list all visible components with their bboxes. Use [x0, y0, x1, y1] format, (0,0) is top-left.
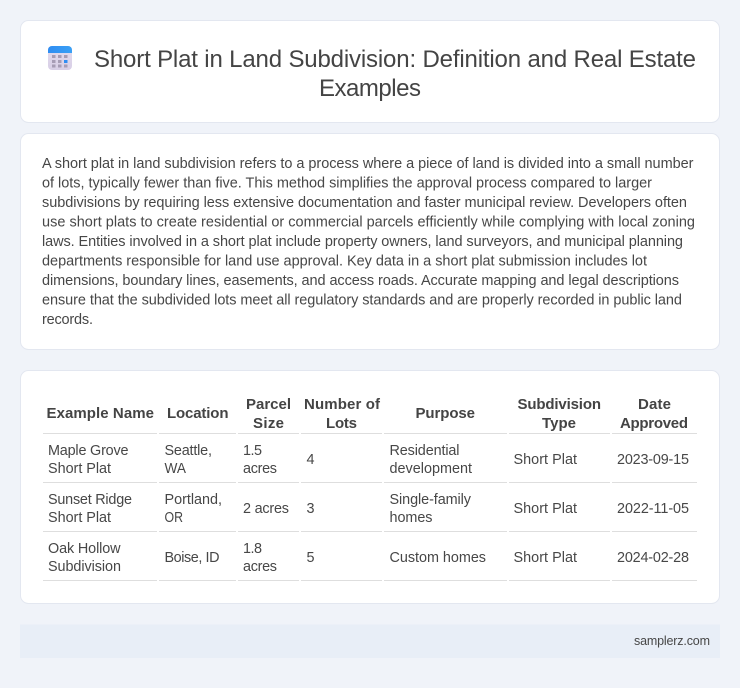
table row: Maple Grove: Seattle,	[164, 443, 212, 459]
table row: Maple Grove: Short Plat	[48, 461, 111, 477]
table header row: Type	[542, 415, 576, 432]
table row: Sunset Ridge: 2 acres	[243, 501, 289, 517]
table header row: Location	[167, 405, 228, 422]
title	[94, 46, 696, 102]
description text: dimensions, boundary lines, easements, and access roads. Accurate mapping and legal descriptions	[42, 273, 679, 289]
table row: Oak Hollow: Subdivision	[48, 559, 121, 575]
table row: Maple Grove: Short Plat	[514, 452, 577, 468]
description text: use short plats to create residential or commercial parcels efficiently while complying with local zoning	[42, 214, 695, 230]
table header row: Size	[253, 415, 284, 432]
table row: Oak Hollow: Custom homes	[390, 550, 486, 566]
table header row: Lots	[326, 415, 357, 432]
table header row: Number of	[304, 396, 381, 413]
table row: Sunset Ridge: Sunset Ridge	[48, 492, 132, 508]
table row: Sunset Ridge	[48, 492, 689, 526]
table header row: Example Name	[46, 405, 154, 422]
table row: Sunset Ridge: Single-family	[390, 492, 472, 508]
description text: subdivisions by requiring less extensive documentation and faster municipal review. Developers often	[42, 195, 687, 211]
table header row: Date	[638, 396, 671, 413]
description text: ensure that the subdivided lots meet all regulatory standards and are properly recorded in public land	[42, 292, 682, 308]
table row: Oak Hollow: 1.8	[243, 541, 262, 557]
description text: records.	[42, 312, 93, 328]
table row: Sunset Ridge: 2022-11-05	[617, 501, 689, 517]
table row: Oak Hollow	[48, 541, 689, 575]
table row: Maple Grove: 4	[306, 452, 315, 468]
panel: description card	[20, 134, 720, 350]
table row: Maple Grove: 1.5	[243, 443, 262, 459]
table row: Maple Grove	[48, 443, 689, 477]
table: short plat examples	[43, 396, 697, 581]
table row: Oak Hollow: 5	[306, 550, 315, 566]
icon: calendar	[48, 46, 72, 70]
table row: Sunset Ridge: Short Plat	[514, 501, 577, 517]
table row: Oak Hollow: 2024-02-28	[617, 550, 689, 566]
title: Examples	[319, 75, 421, 102]
description text: departments responsible for land use approval. Key data in a short plat submission includes lot	[42, 254, 647, 270]
table header row: Parcel	[246, 396, 291, 413]
table row: Maple Grove: acres	[243, 461, 277, 477]
description text	[42, 156, 695, 328]
panel: examples table card	[20, 370, 720, 604]
table header row: Subdivision	[518, 396, 601, 413]
table row: Oak Hollow: Short Plat	[514, 550, 577, 566]
table row: Sunset Ridge: OR	[164, 510, 183, 526]
title: Short Plat in Land Subdivision: Definition and Real Estate	[94, 46, 696, 73]
description text: A short plat in land subdivision refers to a process where a piece of land is divided into a small number	[42, 156, 694, 172]
footer credit: samplerz.com	[634, 634, 710, 648]
table header row: Purpose	[416, 405, 475, 422]
table row: Sunset Ridge: homes	[390, 510, 432, 526]
table row: Sunset Ridge: Short Plat	[48, 510, 111, 526]
panel: title card	[20, 20, 720, 122]
table row: Maple Grove: development	[390, 461, 472, 477]
table row: Sunset Ridge: Portland,	[164, 492, 222, 508]
table row: Maple Grove: Maple Grove	[48, 443, 128, 459]
footer bar	[20, 624, 720, 658]
table row: Maple Grove: WA	[164, 461, 186, 477]
table row: Sunset Ridge: 3	[306, 501, 315, 517]
description text: of lots, typically fewer than five. This method simplifies the approval process compared to larger	[42, 176, 652, 192]
table header row	[46, 396, 688, 432]
table row: Oak Hollow: Oak Hollow	[48, 541, 121, 557]
table row: Oak Hollow: Boise, ID	[164, 550, 220, 566]
table header row: Approved	[620, 415, 688, 432]
table row: Maple Grove: Residential	[390, 443, 460, 459]
description text: laws. Entities involved in a short plat include property owners, land surveyors, and municipal planning	[42, 234, 683, 250]
table row: Oak Hollow: acres	[243, 559, 277, 575]
table row: Maple Grove: 2023-09-15	[617, 452, 689, 468]
